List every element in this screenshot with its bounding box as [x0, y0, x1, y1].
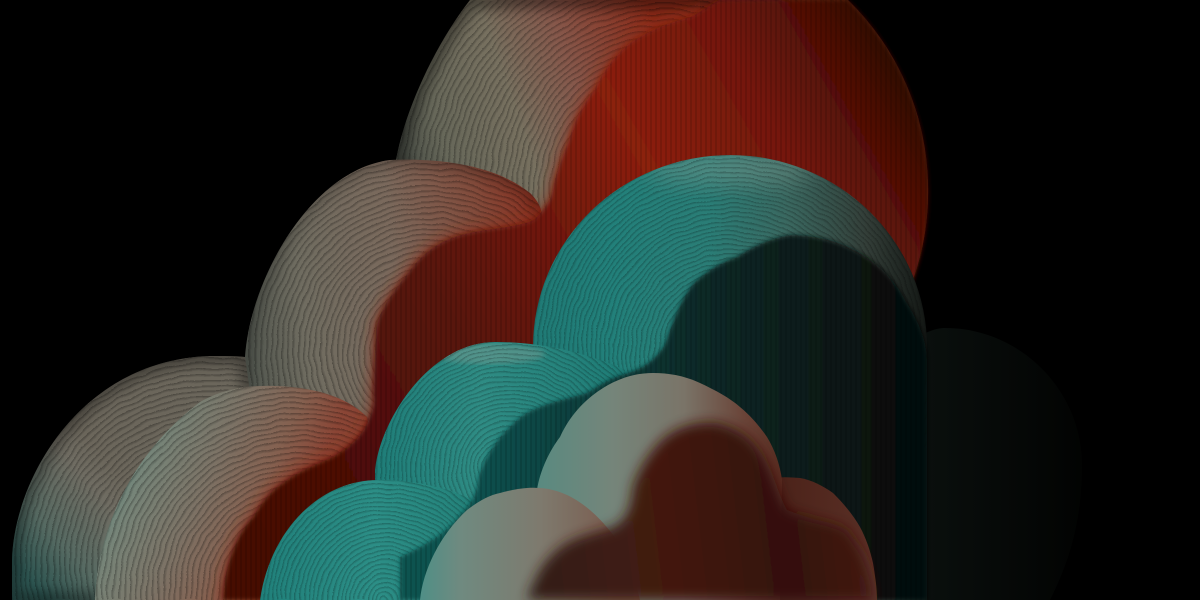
red cloud interior	[223, 0, 928, 600]
teal cloud, middle layer	[258, 150, 930, 600]
highlight on teal middle lobe	[435, 344, 545, 364]
front cloud dark red interior	[527, 423, 873, 600]
front cloud right lobe	[740, 477, 877, 600]
teal cloud middle lobe rim	[375, 342, 625, 501]
red cloud middle lobe rim	[240, 155, 550, 435]
front cloud, muted grey to red	[420, 373, 877, 600]
front cloud left lobe	[420, 488, 640, 600]
red cloud, back layer	[10, 0, 930, 600]
red cloud top lobe rim	[396, 0, 928, 278]
red cloud front lobe rim	[95, 386, 368, 600]
faint far cloud	[905, 328, 1082, 600]
top highlight on teal rim	[645, 152, 815, 184]
teal cloud lower lobe rim	[260, 480, 472, 600]
front cloud top lobe	[537, 373, 782, 600]
teal cloud dark interior	[400, 235, 927, 600]
teal cloud big lobe rim	[530, 150, 930, 600]
red cloud lower lobe rim	[12, 356, 249, 600]
